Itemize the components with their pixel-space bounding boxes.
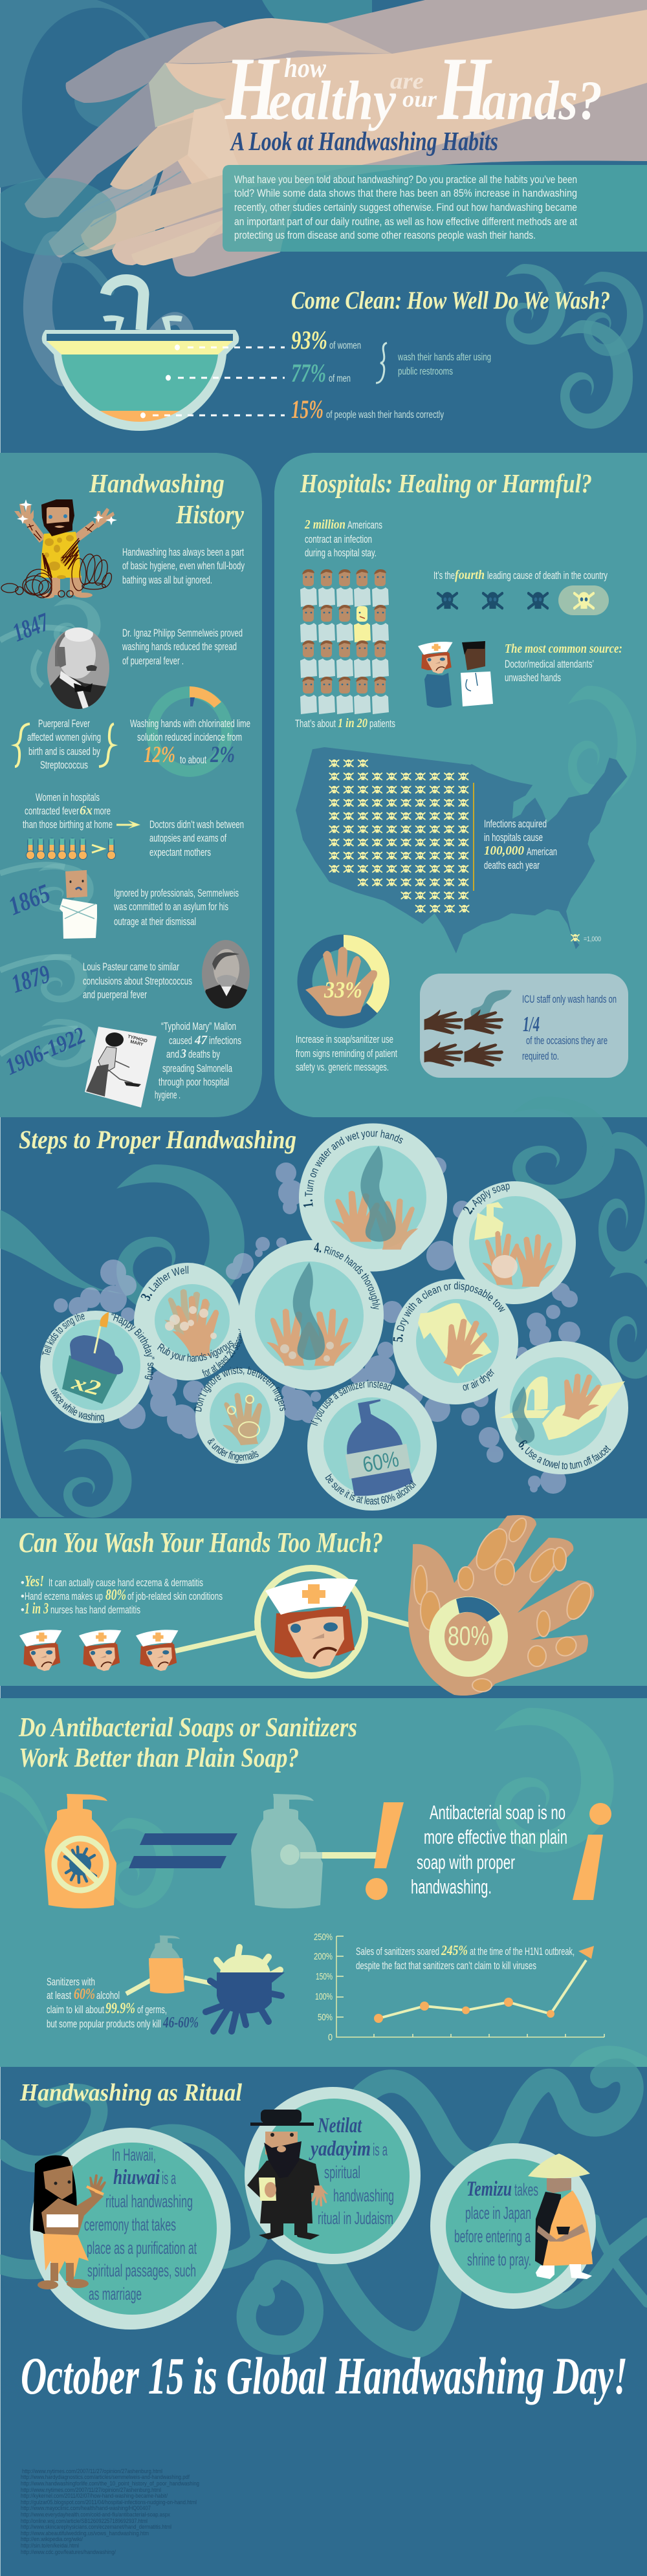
tip: sing happy birthday: x2	[69, 1370, 104, 1400]
stat: 77% of men: 77%	[291, 358, 326, 387]
text: netilat yadayim: yadayim	[309, 2137, 371, 2161]
step 3: lather well	[134, 1263, 243, 1381]
text: antibacterial claim: handwashing.	[411, 1875, 492, 1898]
stat: 77% of men: of men	[329, 373, 351, 384]
step 3: lather well: 3. Lather Well	[141, 1265, 189, 1302]
text: 2 million Americans	[304, 518, 382, 559]
text: handwashing history intro: of basic hygiene, even when full-body	[122, 560, 245, 572]
text: 100,000 deaths: in hospitals cause	[484, 832, 543, 844]
text: sanitizers 60% alcohol: at least	[47, 1990, 71, 2002]
sources list: http://gulzar05.blogspot.com/2011/04/hospital-infections-nudging-on-hand.html	[21, 2499, 197, 2506]
sources list: http://sin.to/en/keidai.html	[21, 2542, 79, 2549]
chart: 33% donut with hand: 33%	[324, 977, 362, 1003]
text: sanitizers 60% alcohol	[47, 1976, 199, 2031]
panel: can you wash your hands too much	[0, 1518, 647, 1686]
heading: handwashing history	[89, 468, 245, 529]
text: 2 million Americans: during a hospital stay.	[305, 547, 377, 559]
text: sanitizers 60% alcohol: 46-60%	[162, 2014, 199, 2031]
text: netilat yadayim	[309, 2114, 394, 2228]
chart: incidence donut	[130, 686, 250, 771]
ritual: hiuwai in Hawaii	[30, 2128, 230, 2330]
illustration: Typhoid Mary poster	[85, 1027, 157, 1108]
illustration: hand with eczema and 80% donut: 80%	[448, 1621, 489, 1651]
text: sanitizers 60% alcohol: 99.9%	[105, 2000, 135, 2017]
title: how	[284, 54, 327, 83]
chart: incidence donut: solution reduced incidence from	[137, 732, 242, 743]
step 4: rinse hands	[239, 1240, 384, 1390]
bullet list: eczema facts: Yes!	[25, 1573, 44, 1590]
text: hiuwai: spiritual passages, such	[87, 2261, 196, 2280]
stat: six times more	[23, 792, 113, 831]
title: H	[224, 39, 280, 139]
section swirls: steps background	[0, 1097, 647, 1518]
text: Pasteur: conclusions about Streptococcus	[83, 976, 192, 987]
chart: sanitizer sales line: 0	[328, 2032, 333, 2043]
intro text: recently, other studies certainly suggest otherwise. Find out how handwashing became	[234, 202, 577, 213]
tip: sing happy birthday: twice while washing	[50, 1388, 104, 1423]
text: sanitizers 60% alcohol: but some popular products only kill	[47, 2018, 161, 2030]
text: hiuwai: ceremony that takes	[84, 2215, 176, 2234]
text: Typhoid Mary: and	[166, 1049, 179, 1060]
text: 1 in 20 patients	[295, 716, 395, 730]
chart: sanitizer sales line: 200%	[314, 1951, 333, 1962]
text: increase in soap use	[296, 1034, 397, 1073]
chart: sanitizer sales line: despite the fact that sanitizers can’t claim to kill viruses	[356, 1960, 536, 1972]
tip: sing happy birthday: “Happy Birthday” song	[111, 1313, 155, 1381]
chart: sanitizer sales line: 250%	[314, 1932, 333, 1943]
text: 100,000 deaths: American	[527, 846, 557, 858]
callout: ICU staff	[420, 974, 628, 1078]
text: increase in soap use: Increase in soap/sanitizer use	[296, 1034, 393, 1045]
step 5: dry hands	[45, 1279, 531, 1406]
text: Semmelweis: of puerperal fever .	[122, 655, 184, 667]
text: sanitizers 60% alcohol: Sanitizers with	[47, 1976, 95, 1988]
legend: skull equals 1,000: =1,000	[584, 935, 601, 943]
exclamation marks and claim	[366, 1801, 611, 1900]
text: fourth leading cause	[433, 568, 608, 582]
dashed stat leaders	[140, 344, 285, 418]
illustration: Typhoid Mary poster: MARY	[130, 1040, 144, 1047]
intro text: an important part of our daily routine, as well as how effective different methods are at	[234, 216, 577, 228]
sources list	[21, 2468, 199, 2556]
text: Typhoid Mary: caused	[169, 1035, 192, 1047]
bullet list: eczema facts: •	[21, 1577, 25, 1589]
tip: sanitizer 60% alcohol: 60%	[361, 1447, 400, 1478]
heading: antibacterial: Work Better than Plain Soap?	[19, 1743, 299, 1773]
text: Typhoid Mary: hygiene .	[155, 1089, 181, 1101]
step 6: towel to turn off faucet: 6. Use a towel to turn off faucet	[519, 1440, 611, 1470]
panel: intro text box	[223, 165, 647, 252]
title	[224, 39, 602, 139]
text: 1865 Semmelweis: was committed to an asylum for his	[113, 901, 228, 913]
header artwork: swirls and hands	[0, 0, 647, 429]
text: 2 million Americans: contract an infection	[305, 534, 372, 545]
text: Pasteur: Louis Pasteur came to similar	[83, 961, 179, 973]
text: antibacterial claim	[411, 1801, 567, 1898]
text: handwashing history intro: Handwashing has always been a part	[122, 547, 244, 558]
callout: puerperal fever: birth and is caused by	[28, 746, 101, 758]
heading: antibacterial: Do Antibacterial Soaps or Sanitizers	[18, 1713, 357, 1743]
illustration: Typhoid Mary poster: TYPHOID	[127, 1034, 148, 1043]
callout: ICU staff: of the occasions they are	[526, 1035, 608, 1047]
text: temizu: shrine to pray.	[467, 2250, 531, 2269]
step 5: dry hands: or air dryer	[463, 1369, 494, 1391]
connector and magnifier with big nurse	[175, 1568, 429, 1675]
heading: too much: Can You Wash Your Hands Too Much?	[19, 1527, 383, 1558]
text: doctors didn't wash: autopsies and exams of	[149, 833, 226, 844]
heading: handwashing as ritual: Handwashing as Ritual	[19, 2079, 242, 2106]
title: are	[390, 68, 424, 94]
stat: six times more: contracted fever	[25, 805, 79, 817]
icons: thermometers comparison	[26, 838, 115, 859]
intro text: told? While some data shows that there has been an 85% increase in handwashing	[234, 188, 577, 199]
text: sanitizers 60% alcohol: alcohol	[96, 1990, 120, 2002]
icon: antibacterial soap bottle	[45, 1794, 116, 1908]
map: united states with skull grid	[296, 747, 627, 954]
tip: sing happy birthday	[40, 1311, 155, 1423]
step 1: turn on water: 1. Turn on water and wet your hands	[303, 1130, 403, 1207]
text: doctors didn't wash: Doctors didn’t wash between	[149, 819, 244, 831]
text: doctors didn't wash: expectant mothers	[149, 847, 211, 858]
portrait: Pasteur	[202, 940, 250, 1009]
illustration: straitjacket patient	[60, 870, 97, 939]
bullet list: eczema facts: nurses has hand dermatitis	[50, 1604, 140, 1616]
soap bubbles	[54, 1157, 580, 1494]
sources list: http://en.wikipedia.org/wiki/	[21, 2536, 83, 2543]
callout: puerperal fever	[15, 718, 114, 771]
icons: skulls fourth highlighted	[438, 585, 609, 615]
brace and shared caption: public restrooms	[398, 366, 453, 377]
heading: handwashing history: Handwashing	[89, 468, 225, 498]
sources list: http://kykernel.com/2011/02/07/how-hand-washing-became-habit/	[21, 2493, 168, 2500]
step 5: dry hands: 5. Dry with a clean or disposable towel	[393, 1282, 505, 1342]
text: most common source	[505, 642, 622, 684]
heading: handwashing history: History	[175, 499, 245, 529]
sources list: http://www.cdc.gov/features/handwashing/	[21, 2549, 116, 2556]
step 4: rinse hands: 4. Rinse hands thoroughly	[314, 1242, 380, 1309]
text: 100,000 deaths: 100,000	[484, 844, 524, 858]
text: Semmelweis: washing hands reduced the spread	[122, 641, 237, 653]
text: hiuwai: hiuwai	[113, 2166, 160, 2189]
text: hiuwai	[84, 2145, 197, 2304]
sources list: http://www.skincarephysicians.com/eczemanet/hand_dermatitis.html	[21, 2524, 171, 2531]
figure: Japanese worshipper	[528, 2154, 593, 2279]
chart: incidence donut: 12%	[144, 741, 175, 767]
text: 2 million Americans: Americans	[347, 519, 382, 531]
callout: puerperal fever: affected women giving	[27, 732, 101, 743]
text: sanitizers 60% alcohol: of germs,	[137, 2004, 167, 2016]
text: Pasteur: and puerperal fever	[83, 989, 147, 1001]
chart: sanitizer sales line: at the time of the H1N1 outbreak,	[470, 1946, 575, 1958]
sources list: http://www.nytimes.com/2007/11/27/opinion/27ashenburg.html	[22, 2468, 162, 2475]
callout: ICU staff: 1/4	[523, 1012, 540, 1036]
title: ands?	[482, 69, 602, 131]
stat: six times more: more	[94, 805, 111, 817]
text: temizu: Temizu	[466, 2178, 512, 2201]
text: increase in soap use: from signs reminding of patient	[296, 1048, 397, 1060]
text: 100,000 deaths	[484, 818, 557, 871]
step 6: towel to turn off faucet	[495, 1341, 628, 1474]
pictogram: 1 in 20 patients	[300, 569, 389, 714]
stat: 15% wash correctly: of people wash their hands correctly	[326, 409, 444, 420]
illustration: sanitizer and germ	[126, 1936, 285, 2031]
brace and shared caption: wash their hands after using	[397, 352, 491, 363]
text: 1865 Semmelweis	[113, 888, 239, 928]
stat: 93% of women: of women	[329, 340, 361, 351]
text: 1 in 20 patients: That’s about	[295, 718, 336, 730]
text: fourth leading cause: It’s the	[433, 570, 455, 582]
bullet list: eczema facts: •	[21, 1591, 25, 1602]
callout: puerperal fever: Streptococcus	[40, 759, 88, 771]
text: Typhoid Mary: infections	[209, 1035, 241, 1047]
step 1: turn on water	[299, 1123, 466, 1280]
text: netilat yadayim: ritual in Judaism	[318, 2209, 393, 2228]
text: antibacterial claim: more effective than plain	[424, 1826, 567, 1848]
text: temizu: takes	[514, 2180, 538, 2199]
year: 1847: 1847	[8, 607, 54, 647]
figure: rabbi	[247, 2110, 329, 2240]
ritual: temizu in Japan	[430, 2143, 596, 2309]
text: netilat yadayim: Netilat	[317, 2114, 362, 2137]
intro text: protecting us from disease and some other reasons people wash their hands.	[234, 230, 536, 241]
illustration: hand with eczema and 80% donut	[408, 1515, 596, 1696]
subtitle: A Look at Handwashing Habits	[230, 126, 498, 156]
stat: 15% wash correctly: 15%	[291, 395, 324, 424]
bullet list: eczema facts	[21, 1573, 223, 1617]
intro text	[234, 174, 577, 241]
icons: three small nurses	[19, 1630, 178, 1671]
chart: sanitizer sales line: 245%	[441, 1942, 468, 1958]
stat: 15% wash correctly	[291, 395, 444, 424]
title: our	[402, 86, 437, 112]
sources list: http://www.nytimes.com/2007/11/27/opinion/27ashenburg.html	[21, 2487, 161, 2494]
text: Semmelweis: Dr. Ignaz Philipp Semmelweis proved	[122, 628, 243, 639]
text: 100,000 deaths: Infections acquired	[484, 818, 547, 830]
text: increase in soap use: safety vs. generic messages.	[296, 1062, 389, 1073]
text: Typhoid Mary: spreading Salmonella	[162, 1063, 233, 1075]
bullet list: eczema facts: of job-related skin conditions	[127, 1591, 223, 1602]
year: 1879: 1879	[8, 959, 54, 999]
text: 1865 Semmelweis: Ignored by professionals, Semmelweis	[114, 888, 239, 899]
text: antibacterial claim: soap with proper	[417, 1851, 515, 1873]
step 3: lather well: Rub your hands vigorously	[157, 1340, 234, 1362]
callout: ICU staff: required to.	[522, 1051, 559, 1062]
hand: peach lower hand and arm	[81, 10, 647, 265]
arrow	[116, 820, 140, 829]
text: handwashing history intro: bathing was all but ignored.	[122, 574, 212, 586]
text: netilat yadayim: handwashing	[333, 2186, 394, 2205]
tip: sing happy birthday: Tell kids to sing the	[42, 1313, 85, 1355]
step 3: lather well: for at least 20 seconds	[202, 1329, 243, 1377]
bullet list: eczema facts: It can actually cause hand eczema & dermatitis	[49, 1577, 203, 1589]
chart: incidence donut: 2%	[210, 741, 235, 767]
chart: sanitizer sales line: 150%	[316, 1971, 333, 1982]
text: Semmelweis	[122, 628, 243, 667]
text: sanitizers 60% alcohol: claim to kill about	[47, 2004, 104, 2016]
text: doctors didn't wash	[149, 819, 244, 858]
sources list: http://www.abeautifulwedding.us/vows_handwashing.htm	[21, 2530, 149, 2537]
text: hiuwai: as marriage	[89, 2284, 142, 2304]
step 2: apply soap: 2. Apply soap	[463, 1184, 510, 1215]
text: netilat yadayim: spiritual	[324, 2163, 360, 2182]
chart: incidence donut: Washing hands with chlorinated lime	[130, 718, 250, 730]
heading: steps to proper handwashing: Steps to Proper Handwashing	[19, 1125, 296, 1154]
bullet list: eczema facts: Hand eczema makes up	[25, 1591, 103, 1602]
bullet list: eczema facts: •	[21, 1604, 25, 1616]
text: antibacterial claim: Antibacterial soap is no	[430, 1801, 565, 1824]
tip: wrists and fingernails	[194, 1366, 286, 1464]
callout: puerperal fever: Puerperal Fever	[38, 718, 90, 730]
text: hiuwai: place as a purification at	[87, 2238, 197, 2258]
hand: grey upper hand and arm	[25, 0, 647, 276]
title: ealthy	[269, 69, 397, 131]
stat: six times more: Women in hospitals	[36, 792, 100, 803]
tip: wrists and fingernails: Don’t ignore wrists, between fingers	[194, 1366, 286, 1412]
sources list: http://www.mayoclinic.com/health/hand-washing/HQ00407	[21, 2505, 151, 2512]
text: handwashing history intro	[122, 547, 245, 586]
panel: handwashing history	[0, 453, 262, 1117]
text: Typhoid Mary: deaths by	[188, 1049, 221, 1060]
portrait: Semmelweis	[47, 628, 109, 709]
text: Typhoid Mary: 47	[194, 1033, 208, 1047]
icon: sink with fill levels	[39, 279, 239, 431]
sources list: http://www.handwashingforlife.com/the_10_point_history_of_poor_handwashing	[21, 2480, 199, 2487]
text: 1 in 20 patients: 1 in 20	[338, 716, 367, 730]
panel: antibacterial soaps	[0, 1698, 647, 2067]
brace and shared caption	[376, 343, 491, 383]
chart: 33% donut with hand	[305, 935, 389, 1021]
sources list: http://online.wsj.com/article/SB126092257189692937.html	[21, 2518, 148, 2525]
year: 1865: 1865	[5, 878, 54, 921]
stat: 93% of women	[291, 325, 361, 355]
equals sign	[129, 1833, 237, 1868]
text: sanitizers 60% alcohol: 60%	[74, 1986, 95, 2003]
bullet list: eczema facts: 80%	[105, 1587, 126, 1604]
text: 1 in 20 patients: patients	[369, 718, 395, 730]
text: temizu: place in Japan	[465, 2203, 531, 2223]
bullet list: eczema facts: 1 in 3	[25, 1600, 49, 1617]
text: Pasteur	[83, 961, 192, 1001]
heading: hospitals: Hospitals: Healing or Harmful?	[300, 468, 592, 498]
stat: 93% of women: 93%	[291, 325, 327, 355]
text: 2 million Americans: 2 million	[304, 518, 345, 532]
chart: sanitizer sales line: 100%	[315, 1991, 333, 2002]
title: H	[436, 39, 492, 139]
chart: sanitizer sales line	[314, 1932, 604, 2043]
tip: sanitizer 60% alcohol: If you use a sanitizer instead	[311, 1379, 392, 1426]
text: most common source: The most common source:	[505, 642, 622, 656]
text: fourth leading cause: fourth	[455, 568, 485, 582]
text: most common source: unwashed hands	[505, 672, 561, 684]
text: Typhoid Mary: through poor hospital	[159, 1076, 229, 1088]
illustration: caveman with dirty hands	[1, 499, 117, 598]
chart: sanitizer sales line: Sales of sanitizers soared	[356, 1946, 439, 1958]
ritual: netilat yadayim	[245, 2087, 421, 2264]
section swirls: ritual background	[0, 2070, 647, 2345]
stat: six times more: than those birthing at home	[23, 819, 113, 831]
text: Typhoid Mary: “Typhoid Mary” Mallon	[161, 1021, 236, 1032]
chart: sanitizer sales line: 50%	[318, 2012, 333, 2023]
text: hiuwai: is a	[162, 2168, 177, 2188]
tip: wrists and fingernails: & under fingernails	[207, 1439, 259, 1463]
text: hiuwai: ritual handwashing	[105, 2192, 193, 2211]
year: 1906-1922: 1906-1922	[1, 1021, 89, 1080]
figure: Hawaiian woman	[33, 2156, 107, 2289]
text: most common source: Doctor/medical attendants’	[505, 659, 594, 670]
text: Typhoid Mary: 3	[180, 1047, 186, 1061]
text: 100,000 deaths: deaths each year	[484, 860, 540, 871]
step 2: apply soap	[453, 1181, 576, 1304]
text: Typhoid Mary	[155, 1021, 241, 1101]
intro text: What have you been told about handwashing? Do you practice all the habits you’ve been	[234, 174, 577, 186]
text: 1865 Semmelweis: outrage at their dismissal	[114, 916, 196, 928]
sources list: http://www.everydayhealth.com/cold-and-flu/antibacterial-soap.aspx	[21, 2511, 170, 2518]
sources list: http://www.hardydiagnostics.com/articles/semmelweis-and-handwashing.pdf	[21, 2474, 190, 2481]
stat: six times more: 6x	[80, 803, 93, 818]
icon: plain soap bottle	[251, 1794, 377, 1908]
legend: skull equals 1,000	[571, 934, 601, 943]
text: netilat yadayim: is a	[373, 2140, 388, 2159]
heading: antibacterial	[18, 1713, 357, 1773]
chart: incidence donut: to about	[180, 754, 206, 766]
text: temizu: before entering a	[454, 2227, 531, 2246]
text: temizu	[454, 2178, 538, 2269]
text: hiuwai: In Hawaii,	[112, 2145, 156, 2165]
illustration: nurse and doctor	[418, 641, 493, 708]
panel: hospitals healing or harmful	[274, 453, 647, 1117]
tip: sanitizer 60% alcohol	[307, 1379, 437, 1511]
tip: sanitizer 60% alcohol: be sure it is at least 60% alcohol	[325, 1474, 417, 1505]
